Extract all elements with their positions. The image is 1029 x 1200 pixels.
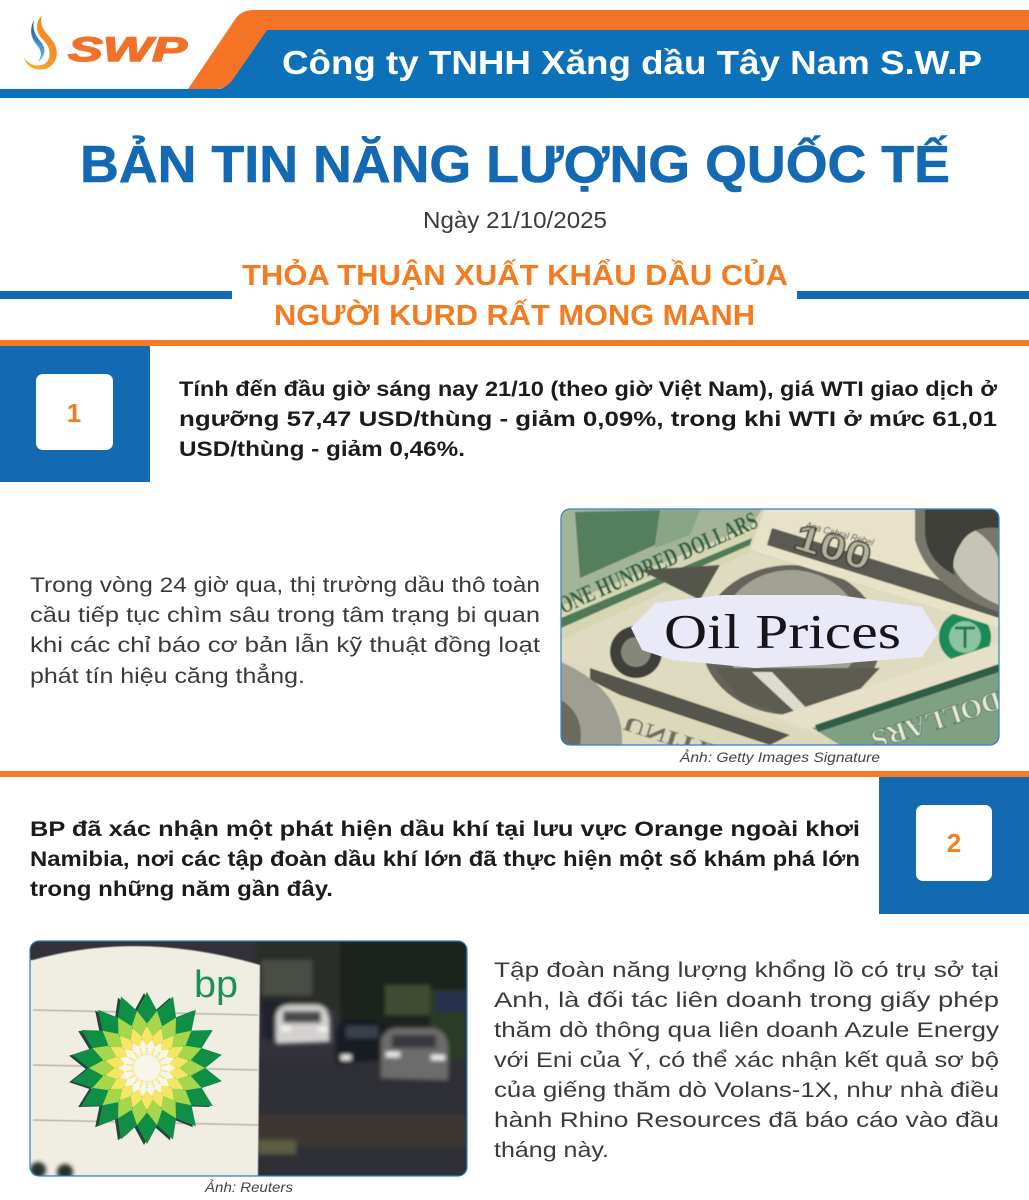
BP helios logo bbox=[69, 992, 222, 1145]
paragraph 1: Trong vòng 24 giờ qua, thị trường dầu thô toàn bbox=[30, 574, 540, 597]
paragraph 2 bbox=[494, 959, 1000, 1162]
caption 1: Ảnh: Getty Images Signature bbox=[679, 748, 880, 765]
paragraph 2: Anh, là đối tác liên doanh trong giấy phép bbox=[494, 989, 999, 1012]
paragraph 2: Tập đoàn năng lượng khổng lồ có trụ sở tại bbox=[494, 959, 999, 982]
paragraph 1: cầu tiếp tục chìm sâu trong tâm trạng bi quan bbox=[30, 604, 540, 627]
paragraph 1: phát tín hiệu căng thẳng. bbox=[30, 664, 305, 688]
lead text 1: Tính đến đầu giờ sáng nay 21/10 (theo giờ Việt Nam), giá WTI giao dịch ở bbox=[179, 378, 997, 401]
date: Ngày 21/10/2025 bbox=[423, 207, 607, 233]
paragraph 2: hành Rhino Resources đã báo cáo vào đầu bbox=[494, 1109, 999, 1132]
paragraph 2: của giếng thăm dò Volans-1X, như nhà điều bbox=[494, 1079, 999, 1102]
subtitle with side bars: NGƯỜI KURD RẤT MONG MANH bbox=[274, 298, 755, 332]
caption 2: Ảnh: Reuters bbox=[204, 1178, 293, 1195]
car silhouettes bbox=[262, 1000, 448, 1080]
lead text 2: Namibia, nơi các tập đoàn dầu khí lớn đã thực hiện một số khám phá lớn bbox=[30, 848, 860, 871]
number badge 2 bbox=[879, 777, 1029, 914]
number badge 1 bbox=[0, 346, 150, 482]
bottom right bill: DOLLARS bbox=[868, 685, 1005, 756]
lead text 2: BP đã xác nhận một phát hiện dầu khí tại lưu vực Orange ngoài khơi bbox=[30, 818, 860, 841]
lead text 1 bbox=[179, 378, 997, 461]
title: BẢN TIN NĂNG LƯỢNG QUỐC TẾ bbox=[80, 135, 950, 194]
top right bill bbox=[750, 509, 999, 628]
paragraph 2: với Eni của Ý, có thể xác nhận kết quả sơ bộ bbox=[494, 1049, 999, 1072]
lead text 2 bbox=[30, 818, 860, 901]
paragraph 1: khi các chỉ báo cơ bản lẫn kỹ thuật đồng loạt bbox=[30, 634, 540, 657]
company name: Công ty TNHH Xăng dầu Tây Nam S.W.P bbox=[282, 44, 982, 81]
top right bill: 100 bbox=[789, 516, 876, 579]
photo: oil prices on dollar bills bbox=[560, 508, 1000, 746]
lead text 1: USD/thùng - giảm 0,46%. bbox=[179, 438, 465, 461]
subtitle with side bars bbox=[0, 258, 1029, 332]
paragraph 2: thăm dò thông qua liên doanh Azule Energy bbox=[494, 1019, 1000, 1042]
lead text 1: ngưỡng 57,47 USD/thùng - giảm 0,09%, trong khi WTI ở mức 61,01 bbox=[179, 408, 997, 431]
logo wordmark: SWP bbox=[68, 31, 187, 69]
header banner bbox=[0, 10, 1029, 98]
bottom left bill: UNITED bbox=[620, 711, 742, 771]
paragraph 1 bbox=[30, 574, 540, 688]
bottom left bill bbox=[562, 662, 790, 744]
bottom right bill bbox=[782, 646, 998, 744]
torn paper label bbox=[631, 595, 938, 668]
number badge 1: 1 bbox=[67, 398, 81, 428]
lead text 2: trong những năm gần đây. bbox=[30, 878, 333, 901]
centre bill bbox=[610, 564, 992, 715]
top left bill bbox=[562, 510, 762, 629]
subtitle with side bars: THỎA THUẬN XUẤT KHẨU DẦU CỦA bbox=[242, 258, 788, 292]
top right bill: Ana Cabral Rebel bbox=[803, 520, 875, 549]
bp wordmark: bp bbox=[194, 964, 238, 1006]
torn paper label: Oil Prices bbox=[664, 604, 901, 659]
paragraph 2: tháng này. bbox=[494, 1139, 609, 1162]
number badge 2: 2 bbox=[947, 828, 961, 858]
logo: SWP flame bbox=[24, 15, 187, 70]
photo: BP sign with cars bbox=[30, 941, 467, 1181]
top left bill: ONE HUNDRED DOLLARS bbox=[554, 507, 762, 619]
sign panel bbox=[30, 946, 260, 1176]
